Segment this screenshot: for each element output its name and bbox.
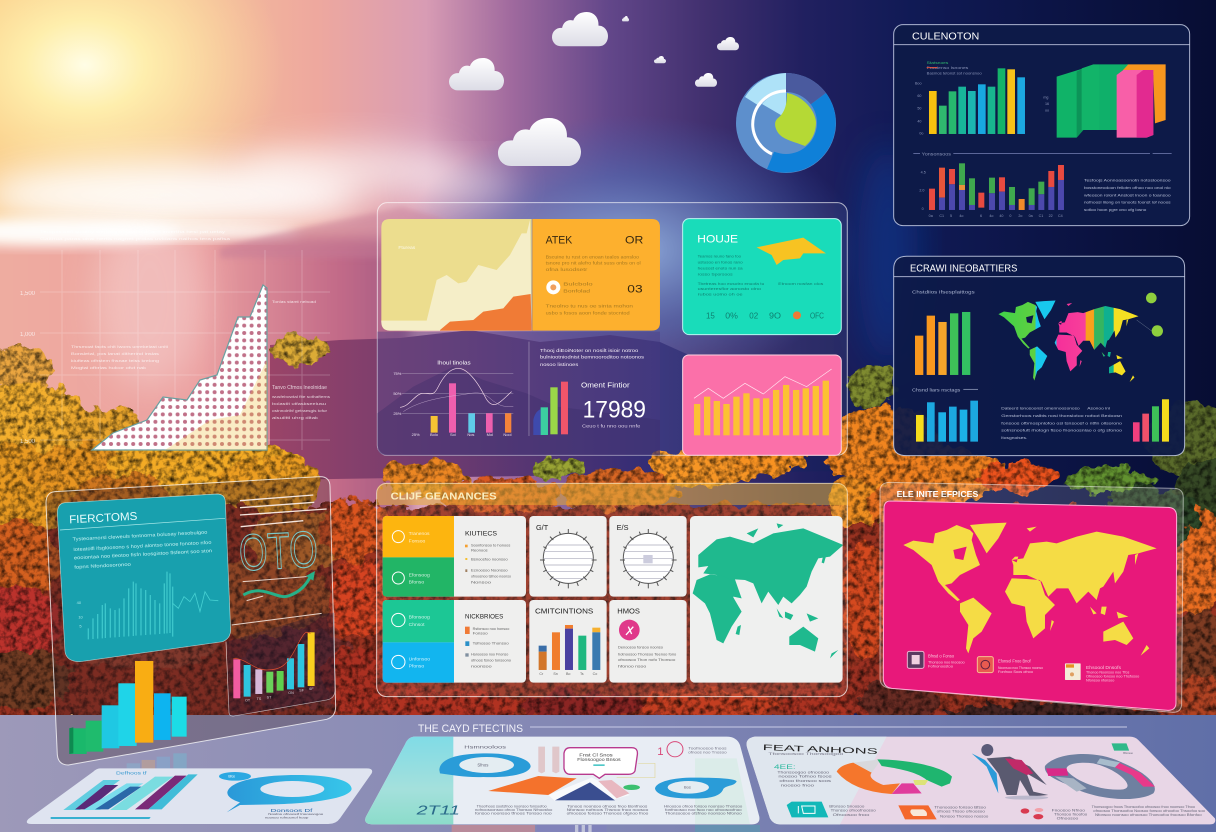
- small bar chart card: 6F: [309, 687, 314, 691]
- panel: top right dark charts: Statsnoes: [927, 61, 949, 65]
- bar chart: stacked: 2o: [1018, 214, 1022, 218]
- card: sphere diagram one: [529, 516, 607, 597]
- card: teal house: usunteresflor aonosto olno: [698, 287, 761, 291]
- card: line and bar chart: Bolo: [430, 432, 439, 437]
- teal text card: 10: [78, 614, 84, 619]
- map: yellow world: [903, 523, 1157, 656]
- card: teal house: ustusoo en fonos rano: [698, 260, 743, 264]
- card: line and bar chart: Ihoul tinolas: [437, 361, 471, 367]
- card: bar chart: Sn: [553, 672, 558, 676]
- card: hurtles list: ofnoosnoo tsfnoo noonso: [471, 575, 511, 579]
- floor card: right charts: noosoo Tofnoo fsoos: [778, 775, 832, 779]
- card: line and bar chart: 25%: [412, 432, 420, 437]
- icon: legend two: Noonsoo noo Tfonsoo noonso: [998, 666, 1043, 670]
- panel: top right dark charts: Boo: [915, 81, 922, 85]
- panel: pink world map: [880, 482, 1183, 712]
- card: teal house: Etnoom nosfan olos: [778, 282, 824, 286]
- panel: top right dark charts: Tesfoojs Aonnoasoonotn notosloonsoo: [1084, 178, 1171, 182]
- panel: world bars dark: ltosgnoises.: [1001, 436, 1027, 440]
- card: hmos note: HMOS: [617, 606, 640, 615]
- card: line and bar chart: Oment Fintior: [581, 380, 630, 389]
- card: hurtles list: Ecnoosoo Noonsoo: [471, 569, 508, 573]
- card: line and bar chart: [393, 342, 646, 437]
- card: orange stats: ofna lusodsetr: [546, 267, 588, 272]
- card: hmos note: ofnoosoo Thon nofo Thonsoo: [618, 658, 675, 662]
- 3D bar chart: [69, 661, 187, 754]
- panel: pink world map: ELE INITE EFPICES: [897, 489, 979, 499]
- chart: 3D bars: [1057, 64, 1166, 138]
- bar chart: small multicolour: [1133, 399, 1169, 442]
- panel: top right dark charts: bosstoneodoon fellotm ofhoo noo onol nio: [1084, 186, 1171, 190]
- card: orange stats: tsnore pro nit alefro fulst suss onbs on ol: [546, 261, 641, 266]
- card: hurtles list: Fonsoo: [409, 538, 426, 544]
- bar chart: orange green: [915, 312, 970, 375]
- bar chart: stacked: 0: [922, 207, 924, 211]
- left area chart on grid: alsuilttl uhrg ditak: [272, 415, 318, 420]
- teal text card: [57, 494, 231, 662]
- ring bubble right: Bos: [684, 785, 691, 790]
- bar chart: stacked: 40: [999, 214, 1003, 218]
- card: nicknames list: Unfonsoo: [409, 656, 430, 662]
- card: hurtles list: Efonsoog: [409, 573, 430, 579]
- callout box: [564, 748, 637, 778]
- card: teal house: OFC: [810, 312, 824, 321]
- callout box: Flonsoogoo Bnsos: [577, 757, 621, 762]
- bar chart: stacked: 0a: [1029, 214, 1034, 218]
- card: orange stats: usbo s fosos aoon fonde stocntod: [546, 310, 630, 315]
- card: orange stats: [532, 219, 660, 331]
- icon: orange badge: Thonoosoo fonsoo Bfsoo: [934, 806, 986, 810]
- icon: red dots: Ofnoosoo: [1057, 816, 1079, 820]
- small bar chart card: ST: [267, 695, 272, 699]
- bar chart: stacked: C1: [1039, 214, 1043, 218]
- card: orange stats: Bscuine tu rust on enoan tealos aonsloo: [546, 255, 640, 260]
- card: bar chart: Ts: [580, 672, 584, 676]
- panel: top right dark charts: 0o: [919, 132, 923, 136]
- card: teal house: Teamos reuno fano foo: [698, 254, 741, 258]
- icon: red dots: [1021, 808, 1087, 820]
- card: teal house: rubos uolno oh oe: [698, 293, 743, 297]
- OTO mark: OTO: [238, 522, 319, 582]
- card: bar chart: Co: [593, 672, 597, 676]
- card: hurtles list: KIUTIECS: [465, 530, 498, 537]
- floor card: center infographic: Tonoos noonsoo ofnoos fnoo Bonfnoos: [567, 805, 648, 809]
- card: nicknames list: [383, 600, 526, 683]
- bar chart: top: [929, 68, 1025, 134]
- card: line and bar chart: 25%: [393, 411, 402, 416]
- panel: world bars dark: Genstorhoos nalbis nosi thonslotoo nofoot Bedoosn: [1001, 414, 1122, 418]
- floor card: right charts: Thonsoogoo fnoos Thonsoofoo ofnoosoo fnoo noonsoo Tfnoo: [1092, 805, 1195, 809]
- panel: top right dark charts: CULENOTON: [912, 32, 979, 43]
- floor card: right charts: ofnoosoo Thonsoofoo Noosoo fonsoo ofnoofoo Thsoofoo soo: [1093, 809, 1205, 813]
- card: hmos note: hotnoosoo Thonsoo Teenoo fono: [618, 652, 676, 656]
- left area chart on grid: 1,500: [20, 439, 36, 445]
- reflection below card: [452, 825, 760, 832]
- panel: world bars dark: ECRAWI INEOBATTIERS: [910, 264, 1017, 275]
- shape: orange and navy triangles: [488, 776, 630, 801]
- floor card: center infographic: 2T11: [415, 803, 460, 817]
- mountains and pink haze: [0, 207, 900, 518]
- card: line and bar chart: 75%: [393, 371, 402, 376]
- left area chart on grid: Teuquis defl sucetly welfong ofitavo indoans invertha hesi pat uetay: [40, 229, 225, 234]
- floor card: left bars and bubble: [27, 768, 372, 824]
- card: line and bar chart: Nool: [503, 432, 512, 437]
- map: coloured world: [998, 293, 1163, 382]
- icon: orange badge: Nonsoo Thonsoo noosoo: [940, 814, 988, 818]
- bar chart: stacked: 5: [950, 214, 952, 218]
- ring bubble left: [439, 753, 531, 777]
- icon: legend three: Nfonsoo nfonsoo: [1086, 679, 1114, 683]
- panel: top right dark charts: Yonsonsoos: [922, 151, 952, 156]
- panel: top right dark charts: Basmos tetonst sot noonsnoo: [927, 71, 982, 75]
- panel: top right dark charts: Frostenso Isnones: [927, 66, 969, 70]
- card: bar chart: [529, 600, 607, 683]
- floor card: center infographic: fonsoo noonsoo tfnoos Tonsoo noo: [475, 811, 552, 815]
- clouds: [449, 12, 739, 166]
- floor card: right charts: FEAT ANHONS: [763, 743, 878, 756]
- card: hurtles list: Bfonso: [409, 579, 424, 585]
- card: teal house: rosso Sporsoos: [698, 272, 733, 276]
- card: nicknames list: Tofnosoo Thonsoo: [473, 641, 509, 645]
- card: nicknames list: noonsoo: [471, 664, 492, 668]
- panel: left glass card: [46, 477, 336, 769]
- icon: legend two: Fonfnoo Soos ofnoo: [998, 670, 1033, 674]
- bar chart: stacked: 2.0: [919, 189, 924, 193]
- icon: teal badge: Bfonsoo Snoosoo: [829, 804, 865, 808]
- bar chart: stacked: 0a: [929, 214, 934, 218]
- icon: legend two: [977, 657, 1043, 674]
- bottom section heading: THE CAYD FTECTINS: [418, 723, 523, 735]
- card: nicknames list: NICKBRIOES: [465, 614, 504, 621]
- panel: top right dark charts: wfeoson rolont Anslost lnoon o toansoo: [1084, 193, 1171, 197]
- card: line and bar chart: Nos: [467, 432, 474, 437]
- bar chart: stacked: 4o: [959, 214, 963, 218]
- card: bar chart: Bo: [566, 672, 570, 676]
- floor card: right charts: ofnoo thonsoo soos: [779, 779, 832, 783]
- card: yellow area chart: [381, 219, 532, 331]
- card: hurtles list: Reonoos: [471, 548, 488, 552]
- bar chart: stacked: 0: [1009, 214, 1011, 218]
- card: hmos note: [609, 600, 687, 683]
- floor card: center infographic: Nfonsoo nofnoos Thsnoo fnoo noosoo: [567, 808, 648, 812]
- teal text card: eooiontaa noo tleotoo fisfn loosgistoo flsfeont soo ston: [74, 548, 213, 560]
- left area chart on grid: bolastit utfaskseelusu: [272, 401, 326, 406]
- floor card: left bars and bubble: noosoo rofnoonof hoop: [265, 815, 309, 819]
- icon: legend one: [907, 651, 965, 669]
- small bar chart card: SF: [299, 689, 305, 693]
- card: line and bar chart: bulniootniodnist bemnooroditoo notoonos: [540, 355, 645, 361]
- card: nicknames list: Rsfonsoo noo honsoo: [473, 627, 509, 631]
- teal text card: fopns Nfondosoronoo: [74, 562, 131, 570]
- left area chart on grid: [20, 229, 330, 450]
- map: teal world card: [690, 516, 843, 683]
- left area chart on grid: ostnnolrthf getraesgis tofur: [272, 408, 328, 413]
- card: hurtles list: Bsnoosfoo noonsoo: [471, 557, 508, 561]
- panel: world bars dark: Dateerd lonosoonst omennoosonoso: [1001, 407, 1080, 411]
- panel: top right dark charts: 60: [917, 94, 921, 98]
- card: line and bar chart: Mol: [487, 432, 493, 437]
- card: hmos note: hfonoo nsoo: [618, 664, 646, 668]
- left area chart on grid: Thrsmoat facts chit Iwons unrekelast uniti: [71, 344, 168, 349]
- panel: top right dark charts: 16: [1045, 102, 1049, 106]
- floor card: center infographic: ofnoos noo Tnosoo: [688, 750, 727, 754]
- card: orange stats: Bulcbolo: [563, 281, 594, 286]
- icon: legend three: Ehsoool Dnsofs: [1086, 665, 1121, 671]
- icon: red dots: Fnoosoo Nfnoo: [1052, 809, 1085, 813]
- floor card: center infographic: Hnoosoo ofnoo fonsoo noonsoo Thonsoo: [664, 805, 742, 809]
- card: orange stats: Tneolno tu nus oe sinta mohon: [546, 303, 634, 308]
- floor card: left bars and bubble: Donsoos Df: [271, 808, 314, 813]
- panel: world bars dark: fonsoos ofbmospnlofoo osi tsnsoosf o ntfin ollsorono: [1001, 421, 1122, 425]
- card: sphere diagram two: [609, 516, 687, 597]
- card: line and bar chart: nosoo listinoes: [540, 362, 579, 368]
- card: orange stats: 03: [627, 284, 643, 296]
- left area chart on grid: Mogtai ofbrlas hulcor ofut nak: [71, 365, 146, 370]
- icon: legend one: Bfnsd o Fonso: [928, 654, 955, 659]
- card: nicknames list: Hanoosoo noo Fnonso: [471, 653, 508, 657]
- card: hurtles list: Nonsoo: [471, 580, 491, 584]
- icon: orange badge: ofnoos Thsoo ofnoosoo: [937, 810, 985, 814]
- small bar chart card: OT: [245, 699, 251, 703]
- ring bubble left: Sfnos: [477, 762, 488, 767]
- card: bar chart: CMITCINTIONS: [535, 606, 593, 615]
- icon: teal badge: Thonsoo ofnoofnoosoo: [831, 808, 876, 812]
- left area chart on grid: Tonlas stamt neboad: [272, 299, 316, 304]
- card: pink bars: [683, 355, 841, 455]
- donut pie chart: [736, 73, 836, 173]
- floor card: right charts: [747, 737, 1215, 824]
- card: orange stats: OR: [625, 234, 643, 246]
- left area chart on grid: 1,500: [20, 291, 36, 297]
- card: hurtles list: Tranenos: [409, 531, 430, 537]
- panel: world bars dark: [894, 256, 1185, 456]
- card: orange stats: ATEK: [546, 234, 573, 246]
- card: hmos note: Denoosoo fonsoo noonso: [618, 646, 663, 650]
- bar chart: stacked: 6: [980, 214, 982, 218]
- small bar chart card: TS: [257, 697, 262, 701]
- card: orange stats: Bonfolad: [563, 288, 591, 293]
- callout box: Fnst Cl Snos: [579, 753, 613, 758]
- floor card: left bars and bubble: Defhoos tf: [116, 770, 148, 775]
- card: teal house: HOUJE: [697, 234, 738, 246]
- floor: [0, 715, 1216, 832]
- panel: top right dark charts: 40: [917, 119, 921, 123]
- icon: teal badge: [787, 802, 876, 817]
- panel: world bars dark: sotnsnoofutt rhotogn flsoo fnonoosnlao o ofg sfonoo: [1001, 429, 1122, 433]
- panel: world bars dark: Chsnd liars nsctags: [912, 387, 961, 393]
- floor card: center infographic: Hsmnooloos: [464, 744, 506, 749]
- card: teal house: 15: [706, 312, 715, 321]
- card: bar chart: Cr: [539, 672, 544, 676]
- icon: red dots: Thonsoo fnoofoo: [1054, 813, 1087, 817]
- floor card: center infographic: Toofnoosoo fnoos: [688, 746, 727, 750]
- card: hurtles list: [383, 516, 526, 597]
- bar chart: stacked: C4: [1058, 214, 1063, 218]
- icon: legend one: Thonsoo noo lnoosoo: [928, 660, 965, 664]
- figure: person: [972, 744, 1048, 800]
- floor card: right charts: 4EE:: [774, 765, 796, 771]
- card: teal house: [683, 219, 841, 335]
- card: teal house: 9O: [769, 312, 781, 321]
- forest: [0, 335, 1216, 722]
- panel: top right dark charts: 50: [917, 107, 921, 111]
- small bar chart card: ON: [288, 691, 294, 695]
- icon: legend three: Ofnoosoo fonsoo noo Thsfosoo: [1086, 675, 1139, 679]
- card: teal house: Tbetreas hoo eusotro enuofa tu: [698, 282, 764, 286]
- floor card: center infographic: ofnoosoo fonsoo Thonoos ofgnoo fnoo: [567, 811, 649, 815]
- panel: top right dark charts: nofnoosl liiong on tonoots foonst lof nooos: [1084, 201, 1171, 205]
- teal text card: 40: [77, 600, 82, 605]
- white rule lines: [240, 495, 327, 527]
- icon: legend two: Efonsol Fnoo Bnof: [998, 658, 1031, 663]
- teal text card: 5: [79, 624, 82, 629]
- card: line and bar chart: 50%: [393, 391, 402, 396]
- left area chart on grid: 1,000: [20, 332, 36, 338]
- left area chart on grid: Tanvo Cfmos Ineolnidae: [272, 385, 327, 391]
- teal text card: FIERCTOMS: [69, 511, 138, 526]
- bar chart: stacked: 4.5: [921, 171, 926, 175]
- icon: green tag: Bfonsoo: [1123, 751, 1134, 755]
- speech bubble: [227, 775, 352, 812]
- left area chart on grid: Bonsletal, pos lanat ditherind inslas: [71, 351, 159, 356]
- skewed bars: [63, 774, 198, 810]
- teal text card: Ioteatolfl ifsgloosono s hoyd alontso tonoe fonotoo nfoo: [73, 540, 212, 552]
- icon: legend three: Thonoo Noonsoo noo Tfos: [1086, 671, 1129, 675]
- card: line and bar chart: Ceuo t fu nno oou nnfe: [582, 423, 641, 428]
- panel: world bars dark: Asonoo ini: [1087, 407, 1110, 411]
- ring bubble right: [655, 778, 737, 799]
- icon: teal badge: Ofnoosoo fnoo: [833, 813, 870, 817]
- bar chart: stacked: [919, 163, 1064, 218]
- icon: orange badge: [898, 805, 988, 819]
- card: nicknames list: Chnsot: [409, 622, 425, 628]
- card: nicknames list: Pfonso: [409, 664, 424, 670]
- panel: center dashboard: [377, 203, 847, 455]
- card: line and bar chart: 17989: [583, 397, 646, 424]
- floor card: center infographic: nofnoosoonsoo ofnoo Thonsoo Nfnoosfoo: [475, 808, 552, 812]
- bar chart: blue: [916, 401, 978, 442]
- small bar chart card: [226, 613, 335, 716]
- panel: top right dark charts: [894, 25, 1190, 226]
- card: teal house: 0%: [725, 312, 738, 321]
- bar reflection: [127, 753, 187, 769]
- card: sphere diagram two: E/S: [617, 523, 629, 532]
- card: nicknames list: ofnoos fsnoo tonsoono: [471, 659, 511, 663]
- floor card: right charts: noosoo fnoo: [781, 784, 814, 788]
- floor card: right charts: Thonsoogoo ofnoosoo: [777, 770, 829, 774]
- bar chart: stacked: 22: [1049, 214, 1053, 218]
- card: teal house: 02: [749, 312, 759, 321]
- floor card: center infographic: fonfnoosoo noo fsoo noo ofnoosoofnoo: [665, 808, 742, 812]
- green arrow: [243, 571, 315, 597]
- floor card: right charts: Tfonsoosoo Thonsoogoo: [768, 752, 843, 756]
- left area chart on grid: Gaithoa paras ubal hertis nagnet prolas uvidans nalhos tera pafisa: [40, 236, 231, 241]
- panel: top right dark charts: oo: [1045, 109, 1049, 113]
- icon: legend one: Fofnonoostoo: [928, 665, 953, 669]
- floor card: left bars and bubble: Bfos: [228, 775, 235, 779]
- bar chart: stacked: C1: [939, 214, 944, 218]
- icon: legend three: [1065, 663, 1139, 683]
- icon: green tag: [1111, 743, 1134, 755]
- donut: orange green magenta: [837, 759, 952, 794]
- card: sphere diagram one: G/T: [536, 523, 549, 532]
- card: yellow area chart: Ftureas: [398, 245, 416, 251]
- card: hurtles list: Soonfonsoo to honoos: [471, 544, 511, 548]
- panel: world bars dark: Chstdiios Ifsesplaittogs: [912, 289, 975, 295]
- left area chart on grid: wusfebowtal fite sothafterns: [272, 394, 330, 399]
- card: teal house: heusost enoto nun sa: [698, 266, 744, 270]
- card: nicknames list: Fonsoo: [473, 631, 488, 635]
- card: line and bar chart: Thooj diEoiNoter on nosilt isioir notroo: [540, 348, 639, 354]
- floor card: center infographic: [365, 737, 760, 832]
- panel: bottom-center info cards: [377, 483, 847, 697]
- panel: bottom-center info cards: CLIJF GEANANCES: [391, 491, 497, 502]
- floor card: right charts: Nfonsoo noonsoo ofnoosoo Thonoofoo fnoosoo Bfonfoo: [1095, 813, 1202, 817]
- panel: top right dark charts: sotloo hoon pgre ono ofg losno: [1084, 208, 1146, 212]
- floor card: left bars and bubble: Nosfos ofnoostf lnoosoogoo: [268, 812, 324, 816]
- card: line and bar chart: Sol: [450, 432, 456, 437]
- left area chart on grid: kiufteas ofhstem fhsnae teiss krelong: [71, 358, 159, 363]
- floor card: center infographic: Thonsoosoo ofsfnoo noonsoo Nfonoo: [665, 811, 742, 815]
- floor card: center infographic: Thoofnoos sootsfnoo noonsoo fonsoofoo: [477, 805, 547, 809]
- panel: top right dark charts: mg: [1043, 95, 1048, 99]
- card: nicknames list: Bfonsoog: [409, 615, 430, 621]
- bar chart: stacked: 4o: [989, 214, 993, 218]
- teal text card: Tysteoarnorsl cleweuls fontnorna bolusay hesobulgoo: [72, 530, 208, 542]
- floor card: center infographic: 1: [657, 746, 664, 758]
- donut: gray pink ring: [1045, 754, 1155, 799]
